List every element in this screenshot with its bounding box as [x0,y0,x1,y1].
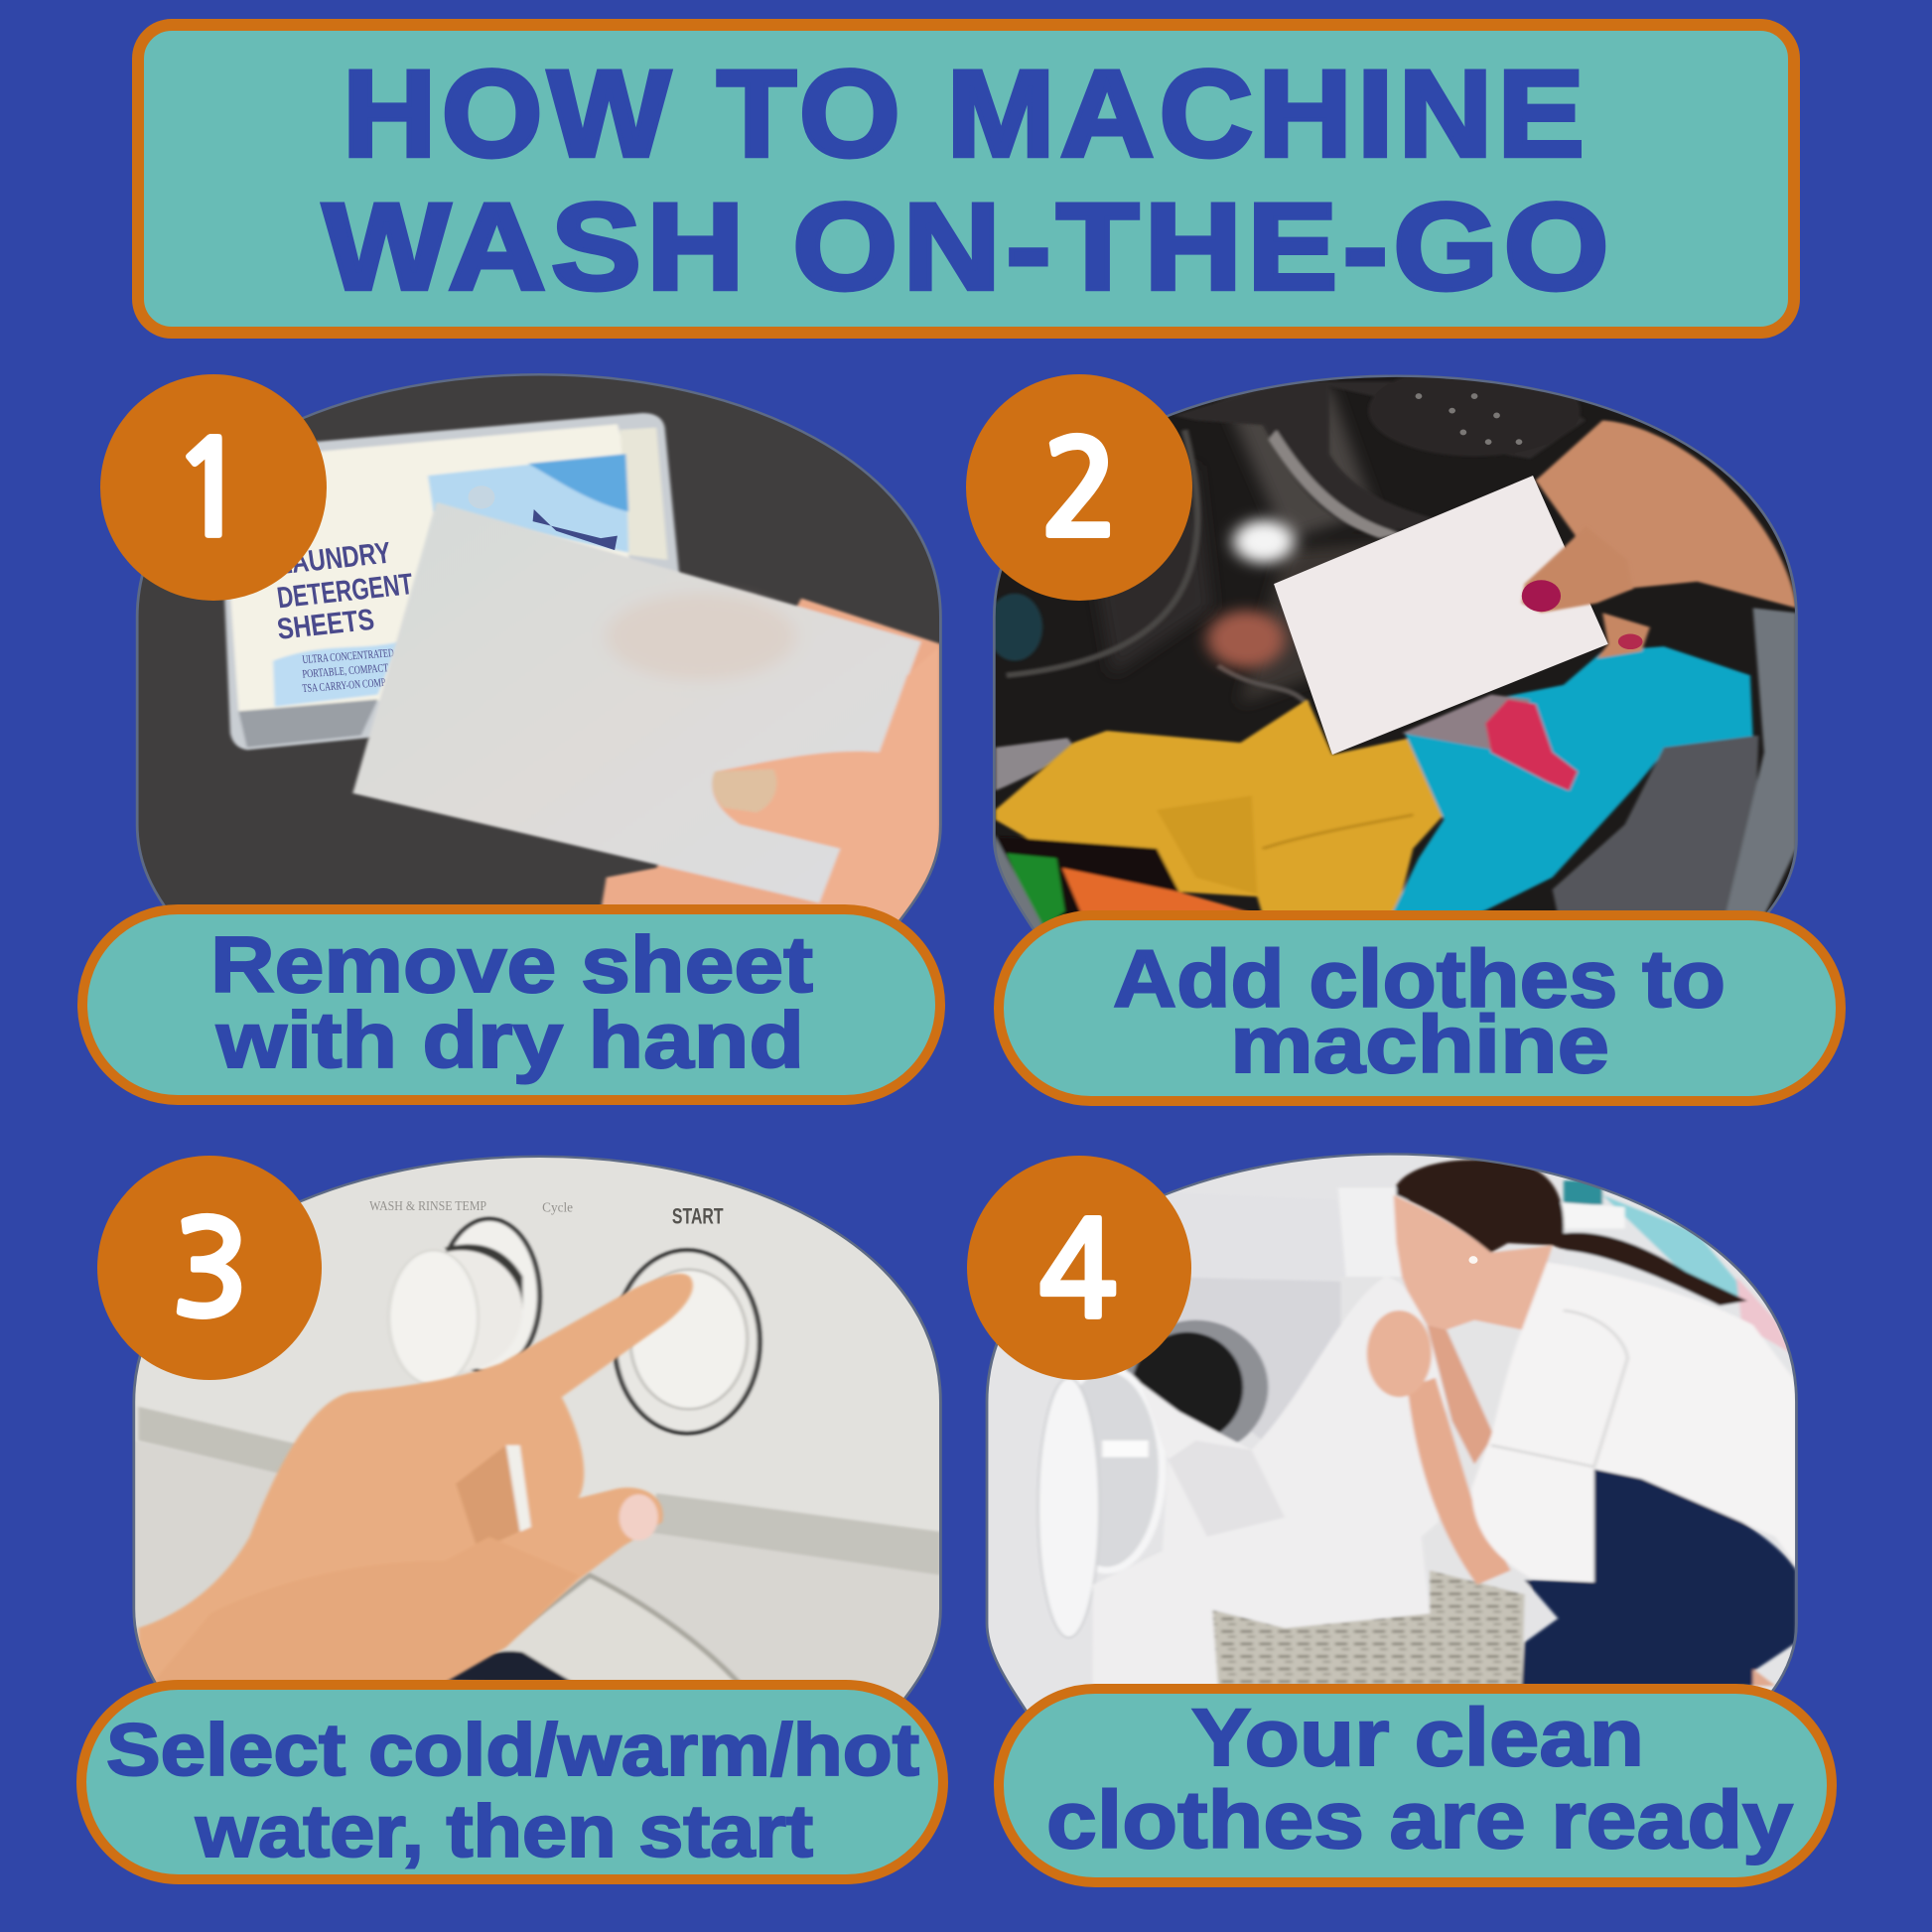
photo: sheet added to drum with clothes [993,375,1798,930]
panel: step 4 [967,1152,1847,1882]
number badge 4: 4 [1037,1205,1119,1337]
title text: HOW TO MACHINE [343,46,1589,183]
box label text: LAUNDRY [275,536,393,581]
panel: step 3 [81,1152,973,1879]
hand holding sheet [1536,420,1796,608]
caption 4: clothes are ready [1046,1775,1793,1865]
box label text [275,536,415,695]
box label text: SHEETS [275,603,376,645]
front arm and hand [1408,1378,1511,1585]
number badge 1 [100,374,327,601]
number badge 2 [966,374,1192,601]
caption 4: Your clean [1191,1693,1644,1783]
number badge 4 [967,1156,1191,1380]
caption 2: machine [1230,1000,1609,1090]
caption 4 [999,1689,1832,1882]
far arm [1427,1324,1494,1464]
title text: WASH ON-THE-GO [323,179,1614,316]
panel label text: START [672,1204,724,1229]
caption 1 [82,909,940,1100]
number badge 3 [97,1156,322,1380]
number badge 1: 1 [170,424,251,556]
hand behind sheet [601,599,940,925]
hand [138,1274,693,1686]
caption 3 [81,1685,943,1879]
shirt [1471,1262,1796,1583]
panel label text [369,1201,723,1223]
hair [1397,1160,1747,1306]
number badge 3: 3 [170,1204,251,1336]
face and neck [1394,1195,1553,1329]
panel: step 1 [82,367,973,1100]
box label text: TSA CARRY-ON COMP [302,676,386,695]
box label text: DETERGENT [275,567,415,615]
box label text: ULTRA CONCENTRATED [302,646,394,666]
caption 3: Select cold/warm/hot [106,1709,919,1791]
caption 2: Add clothes to [1113,934,1725,1025]
caption 3: water, then start [195,1790,813,1872]
jeans [1522,1459,1796,1686]
towel [1093,1277,1447,1686]
basket [1207,1571,1525,1686]
panel label text: Cycle [542,1200,573,1215]
photo: woman smelling clean towel [973,1152,1847,1729]
title text [323,46,1614,316]
caption 1: with dry hand [215,996,804,1084]
photo: sheet held over detergent box [135,373,942,921]
box label text: PORTABLE, COMPACT [302,661,389,680]
title banner [138,25,1794,333]
photo: finger pressing start dial [132,1156,942,1700]
panel: step 2 [966,365,1847,1101]
number badge 2: 2 [1039,424,1121,556]
caption 1: Remove sheet [210,920,813,1009]
caption 2 [999,915,1841,1101]
panel label text: WASH & RINSE TEMP [369,1199,486,1214]
